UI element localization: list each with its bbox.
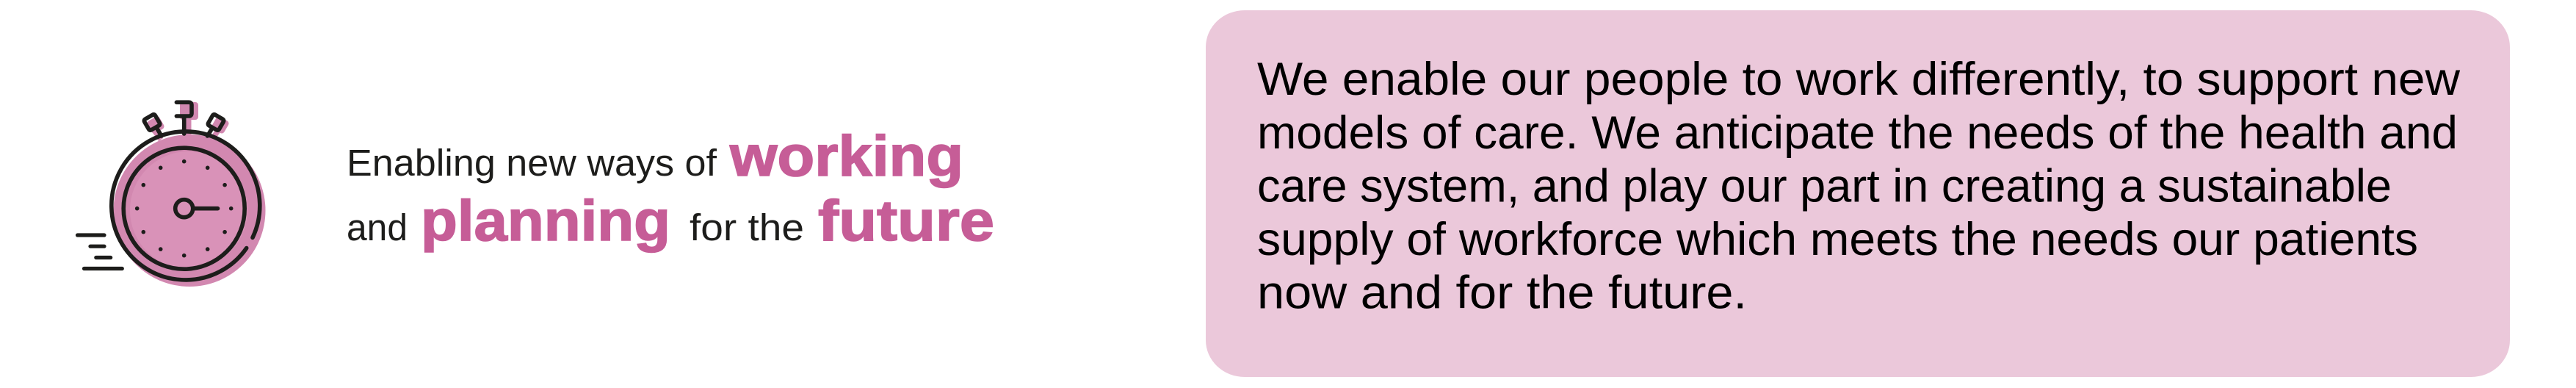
icon: stopwatch <box>78 102 266 287</box>
heading line 2: and <box>347 206 408 248</box>
heading line 2: future <box>818 188 994 253</box>
heading line 2: for the <box>690 206 804 248</box>
speed lines <box>78 235 122 269</box>
panel text: We enable our people to work differently, to support new <box>1257 54 2461 105</box>
panel text: now and for the future. <box>1257 267 1747 319</box>
stopwatch outline <box>112 102 260 280</box>
heading line 2 <box>347 188 994 253</box>
panel text: supply of workforce which meets the needs our patients <box>1257 214 2418 265</box>
heading line 1: Enabling new ways of <box>347 142 717 184</box>
panel background <box>1206 10 2510 377</box>
panel text: models of care. We anticipate the needs of the health and <box>1257 107 2458 159</box>
heading line 1: working <box>729 123 963 188</box>
heading line 1 <box>347 123 963 188</box>
panel: description <box>1206 10 2510 377</box>
clock face tick dots <box>135 159 234 258</box>
heading <box>347 123 994 253</box>
panel text: care system, and play our part in creating a sustainable <box>1257 160 2392 212</box>
panel text <box>1257 54 2461 319</box>
pink offset fill <box>113 102 266 287</box>
heading line 2: planning <box>421 188 670 253</box>
